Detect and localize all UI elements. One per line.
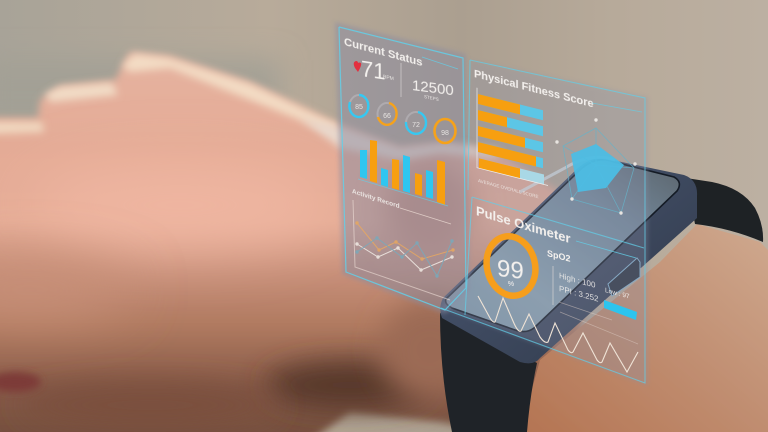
holographic panels tint <box>335 22 648 386</box>
heading rule <box>592 103 642 112</box>
ring: 85 <box>349 95 368 117</box>
ring: 66: 66 <box>383 113 391 120</box>
finger highlights <box>0 122 44 134</box>
step count: 12500 <box>412 77 454 99</box>
side button <box>608 258 640 296</box>
ring: 98: 98 <box>441 130 449 137</box>
axis caption: AVERAGE OVERALL SCORE <box>478 178 538 199</box>
line chart <box>353 200 455 300</box>
screen highlight <box>520 157 615 192</box>
bpm label: BPM <box>383 74 394 82</box>
steps label: STEPS <box>424 94 439 102</box>
heading rule <box>422 57 458 69</box>
watch screen <box>446 160 679 332</box>
far watch band <box>686 178 763 242</box>
divider <box>552 266 554 305</box>
heart rate: 71 <box>361 56 385 85</box>
readout: high: High : 100 <box>559 271 596 290</box>
readout: ppi: PPI : 3.252 <box>559 284 599 304</box>
watch <box>440 157 697 363</box>
heading rule <box>576 241 636 258</box>
horizontal bars <box>477 88 548 186</box>
oxygen gauge: 99 <box>497 255 524 285</box>
rules <box>559 302 638 344</box>
label: spo2: SpO2 <box>547 248 570 264</box>
radar chart <box>555 118 637 215</box>
heading: activity record: Activity Record <box>352 188 400 210</box>
bar chart <box>358 140 448 206</box>
ring: 66 <box>378 103 397 125</box>
divider <box>400 63 402 97</box>
icon: heart <box>354 61 361 72</box>
oxygen gauge: % <box>508 281 514 288</box>
near watch band <box>440 313 537 432</box>
panel frame <box>339 27 466 310</box>
ring: 72 <box>406 112 426 134</box>
oxygen gauge <box>480 231 542 301</box>
blurred hand and wrist <box>0 52 600 432</box>
heading: physical fitness score: Physical Fitness Score <box>474 68 594 110</box>
forearm right of watch <box>520 224 768 432</box>
panel: current status <box>339 27 466 310</box>
ring: 98 <box>434 119 456 143</box>
panel frame <box>441 60 645 383</box>
panel: pulse oximeter <box>476 203 638 372</box>
watch case <box>440 158 697 363</box>
status tag <box>604 300 637 320</box>
ring: 85: 85 <box>355 104 363 111</box>
pulse waveform <box>478 296 638 372</box>
readout: low: Low : 97 <box>605 287 630 301</box>
heading: pulse oximeter: Pulse Oximeter <box>476 203 570 246</box>
ring: 72: 72 <box>412 122 420 129</box>
heading rule <box>400 208 451 224</box>
panel: physical fitness score <box>441 60 645 383</box>
heading: current status: Current Status <box>344 36 422 69</box>
